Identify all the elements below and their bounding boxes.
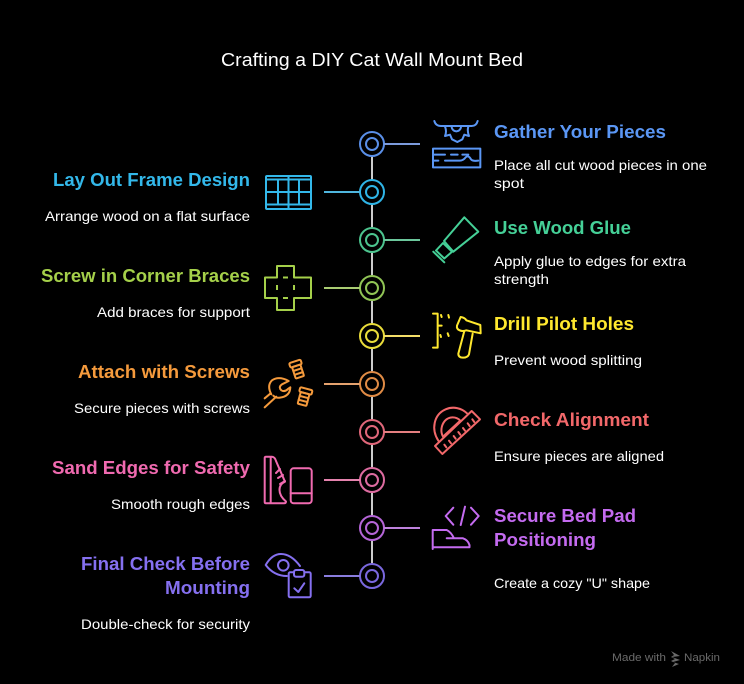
description: Prevent wood splitting bbox=[494, 352, 642, 368]
step 10: final check before mounting bbox=[81, 554, 384, 632]
node 1 bbox=[360, 132, 420, 156]
step 2: lay out frame design bbox=[45, 170, 384, 224]
description line 2: spot bbox=[494, 175, 524, 191]
description: Add braces for support bbox=[97, 304, 250, 320]
watermark: Napkin bbox=[684, 652, 720, 664]
description: Secure pieces with screws bbox=[74, 400, 250, 416]
heading: Drill Pilot Holes bbox=[494, 314, 634, 334]
heading line 2: Positioning bbox=[494, 530, 596, 550]
heading: Final Check Before bbox=[81, 554, 250, 574]
icon: sanding block bbox=[265, 457, 312, 503]
description: Arrange wood on a flat surface bbox=[45, 208, 250, 224]
step 9: secure bed pad positioning bbox=[360, 506, 650, 591]
description: Apply glue to edges for extra bbox=[494, 253, 686, 269]
icon: frame grid bbox=[266, 176, 311, 209]
heading: Sand Edges for Safety bbox=[52, 458, 250, 478]
description line 2: strength bbox=[494, 271, 549, 287]
watermark bbox=[612, 651, 720, 667]
heading: Use Wood Glue bbox=[494, 218, 631, 238]
node 10 bbox=[324, 564, 384, 588]
node 8 bbox=[324, 468, 384, 492]
description: Smooth rough edges bbox=[111, 496, 250, 512]
heading: Check Alignment bbox=[494, 410, 649, 430]
icon: cross brace bbox=[265, 266, 311, 310]
icon: wrench and bolts bbox=[265, 360, 313, 407]
step 7: check alignment bbox=[360, 408, 664, 464]
heading: Gather Your Pieces bbox=[494, 122, 666, 142]
heading: Lay Out Frame Design bbox=[53, 170, 250, 190]
step 1: gather your pieces bbox=[360, 121, 707, 191]
description: Ensure pieces are aligned bbox=[494, 448, 664, 464]
step 8: sand edges for safety bbox=[52, 457, 384, 512]
watermark: Made with bbox=[612, 652, 666, 664]
timeline spine bbox=[371, 156, 373, 564]
step 6: attach with screws bbox=[74, 360, 384, 416]
icon: gear over wood bbox=[433, 121, 480, 167]
icon: eye and clipboard bbox=[266, 554, 311, 597]
node 5 bbox=[360, 324, 420, 348]
step 4: screw in corner braces bbox=[41, 266, 384, 320]
heading line 2: Mounting bbox=[165, 578, 250, 598]
node 4 bbox=[324, 276, 384, 300]
title: Crafting a DIY Cat Wall Mount Bed bbox=[221, 50, 523, 70]
node 6 bbox=[324, 372, 384, 396]
description: Double-check for security bbox=[81, 616, 250, 632]
step 5: drill pilot holes bbox=[360, 314, 642, 368]
description: Create a cozy "U" shape bbox=[494, 575, 650, 591]
description: Place all cut wood pieces in one bbox=[494, 157, 707, 173]
node 9 bbox=[360, 516, 420, 540]
icon: hammer and bracket bbox=[433, 314, 481, 358]
icon: glue tube bbox=[433, 217, 478, 262]
node 2 bbox=[324, 180, 384, 204]
node 3 bbox=[360, 228, 420, 252]
heading: Screw in Corner Braces bbox=[41, 266, 250, 286]
icon: napkin logo bbox=[671, 651, 680, 667]
icon: protractor bbox=[434, 408, 480, 454]
heading: Secure Bed Pad bbox=[494, 506, 636, 526]
icon: code brackets and pad bbox=[433, 507, 479, 549]
node 7 bbox=[360, 420, 420, 444]
step 3: use wood glue bbox=[360, 217, 686, 287]
heading: Attach with Screws bbox=[78, 362, 250, 382]
